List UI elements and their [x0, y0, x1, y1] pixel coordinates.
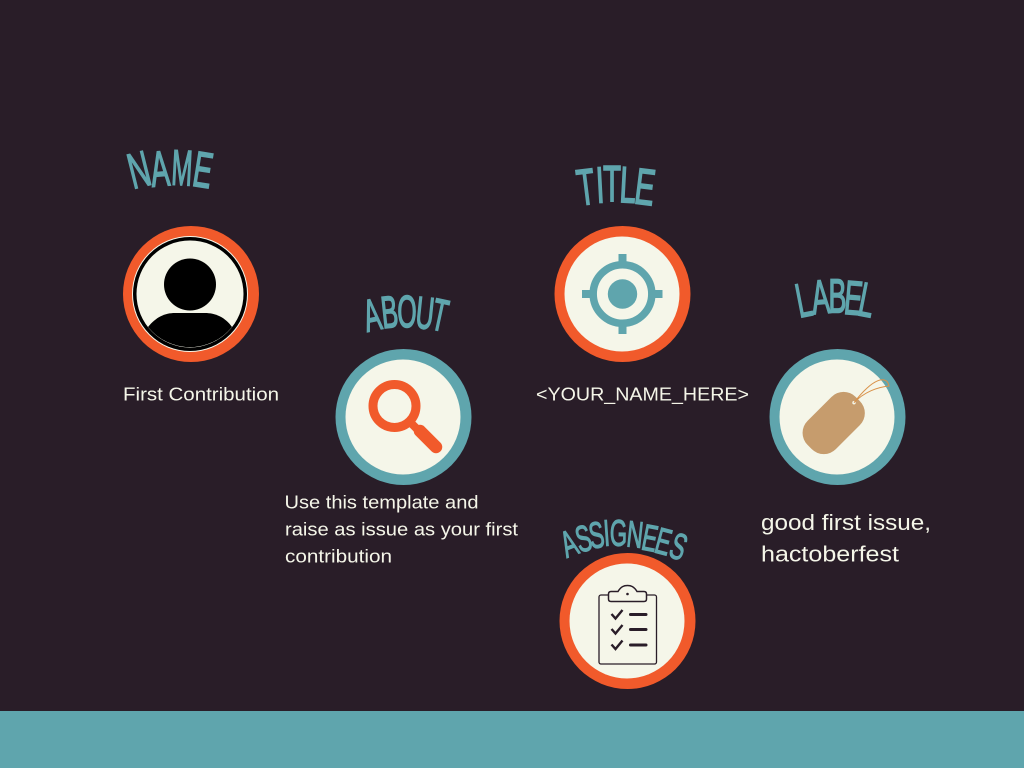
heading: name: M — [170, 140, 194, 197]
heading: label: E — [842, 272, 865, 326]
heading: name: N — [122, 140, 156, 200]
heading: about: U — [413, 287, 437, 339]
bottom teal band — [0, 711, 1024, 768]
heading: assignees — [555, 513, 692, 569]
panel: title — [536, 155, 749, 406]
heading: title: T — [573, 157, 598, 216]
heading: assignees: I — [602, 513, 611, 554]
panel: about — [284, 286, 518, 566]
heading: label: L — [791, 274, 816, 329]
text: label value: hactoberfest — [761, 542, 899, 566]
heading: assignees: S — [664, 525, 692, 569]
text: about description: raise as issue as your first — [285, 520, 518, 540]
icon: clipboard checklist — [560, 553, 696, 689]
heading: about: A — [359, 288, 386, 342]
heading: title: I — [594, 156, 606, 214]
heading: assignees: S — [586, 514, 607, 557]
heading: assignees: E — [639, 517, 661, 560]
icon: price tag — [770, 349, 906, 485]
heading: label — [791, 271, 879, 329]
heading: name: E — [189, 140, 217, 199]
heading: title — [573, 155, 658, 216]
text: about description: Use this template and — [284, 492, 478, 512]
heading: name: A — [148, 140, 172, 198]
icon: person avatar — [123, 226, 259, 362]
text: about description — [284, 492, 518, 566]
text: label value — [761, 510, 931, 566]
heading: name — [122, 140, 217, 200]
icon: magnifying glass — [336, 349, 472, 485]
heading: label: A — [809, 271, 832, 325]
heading: about — [359, 286, 453, 342]
heading: label: L — [854, 274, 879, 329]
text: name value: First Contribution — [123, 384, 279, 404]
heading: title: L — [618, 156, 638, 214]
heading: label: B — [829, 271, 846, 324]
heading: assignees: G — [609, 513, 627, 554]
text: title value: <YOUR_NAME_HERE> — [536, 384, 749, 406]
heading: assignees: N — [625, 514, 645, 556]
icon: target crosshair — [554, 226, 690, 362]
heading: title: T — [603, 155, 621, 213]
heading: title: E — [632, 157, 658, 216]
heading: about: T — [427, 289, 453, 341]
panel: label — [761, 271, 931, 566]
heading: about: B — [379, 286, 400, 338]
text: label value: good first issue, — [761, 510, 931, 535]
heading: assignees: E — [651, 520, 676, 564]
heading: assignees: S — [571, 517, 596, 561]
heading: assignees: A — [555, 522, 584, 566]
heading: about: O — [397, 286, 417, 337]
panel: name — [122, 140, 279, 404]
text: about description: contribution — [285, 546, 392, 566]
panel: assignees — [555, 513, 696, 689]
